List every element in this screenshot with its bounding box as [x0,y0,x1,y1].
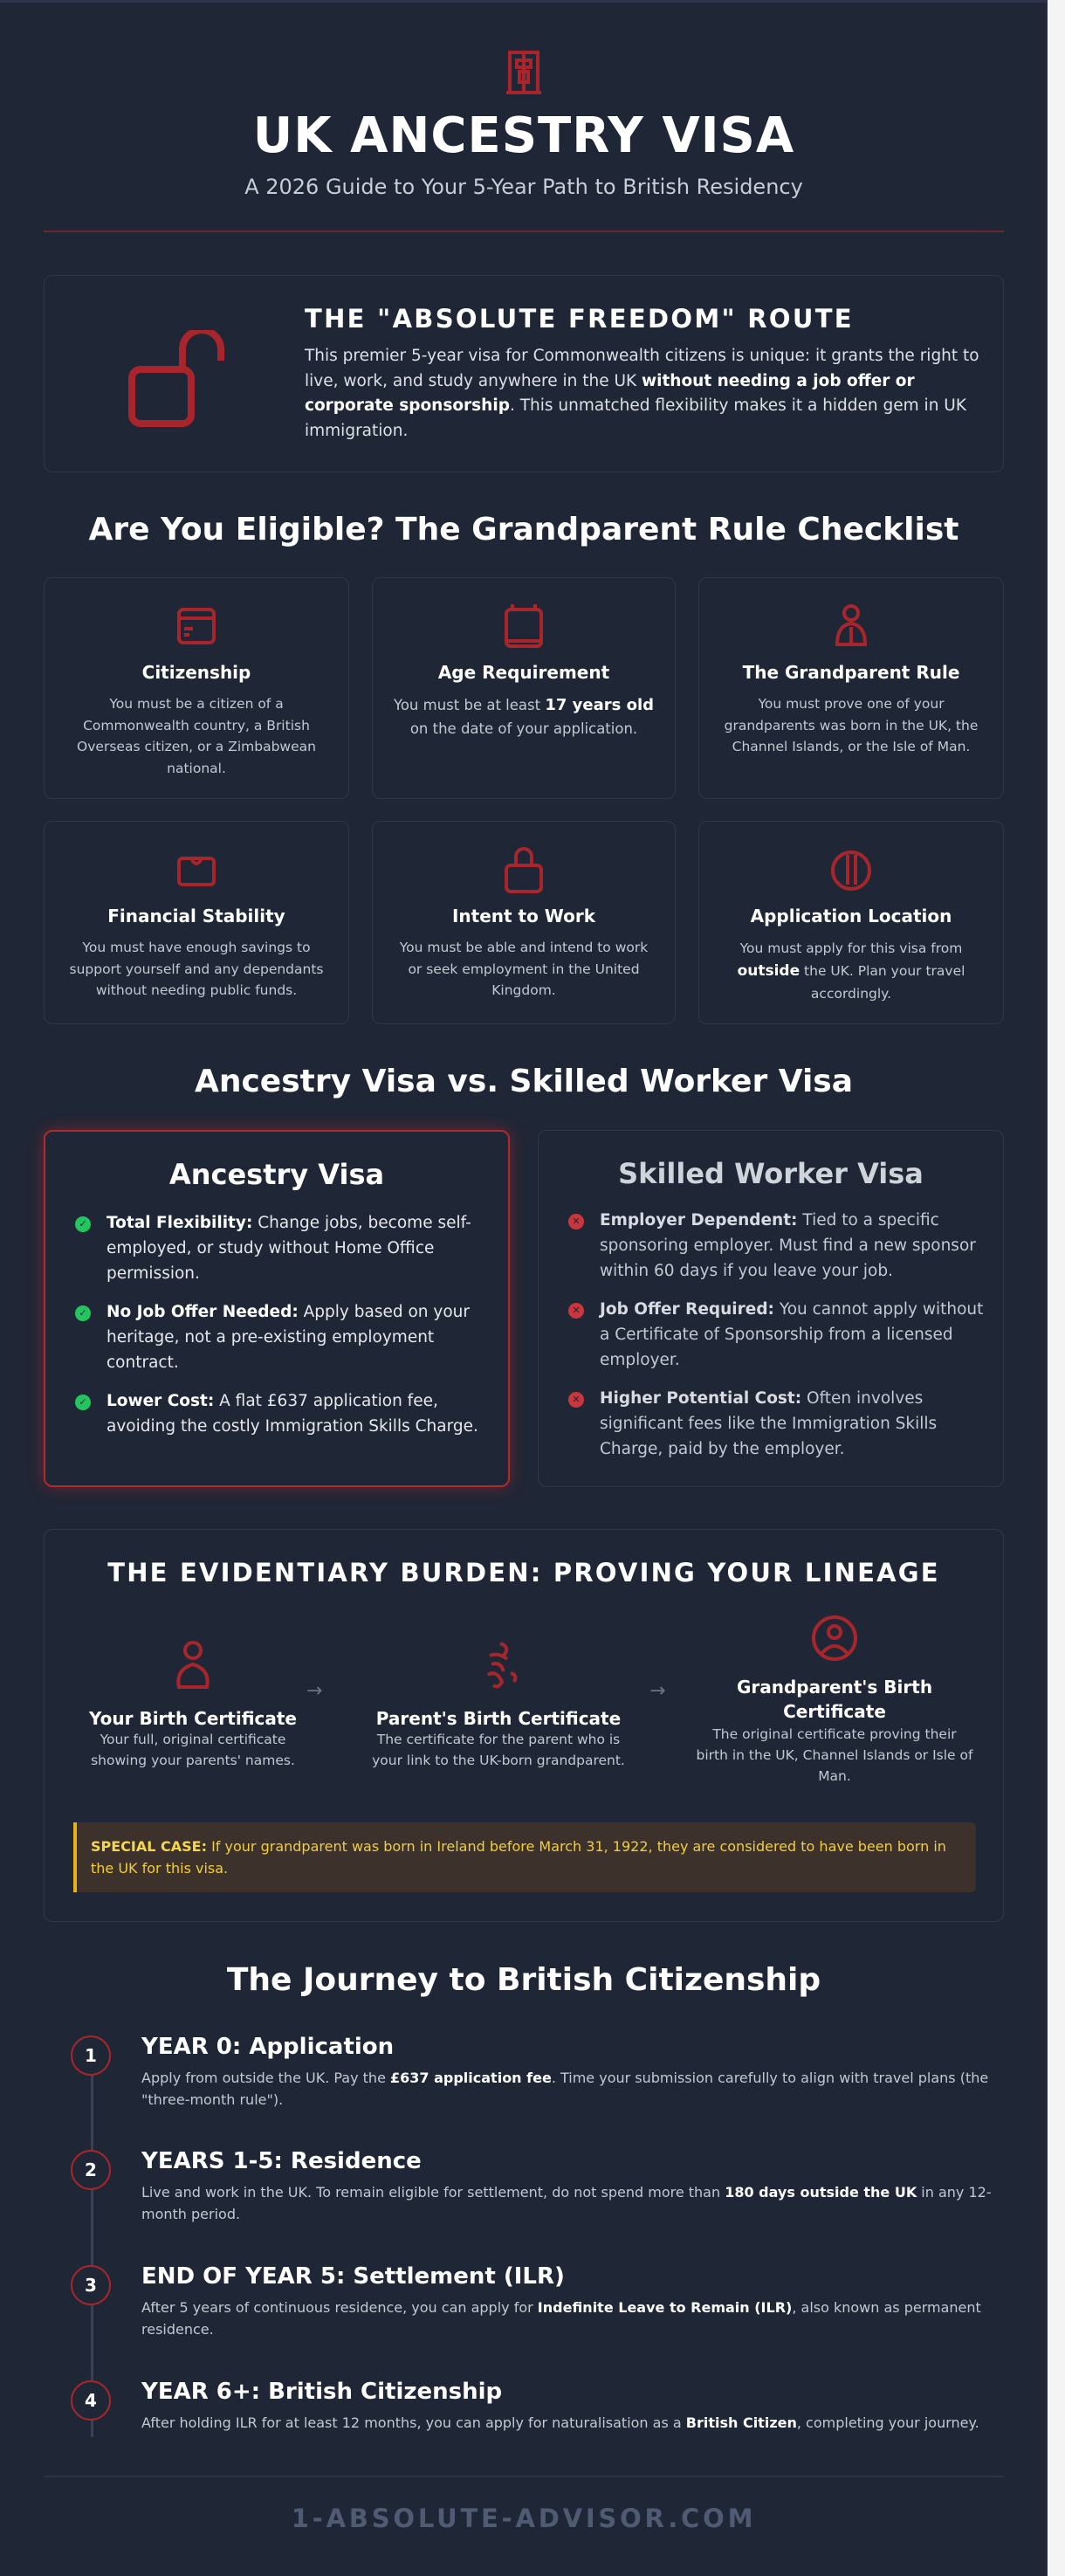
card: intent to work: You must be able and intend to work or seek employment in the United Kingdom. [400,940,648,998]
step 1 [71,2034,988,2108]
panel: absolute freedom route [44,275,1004,472]
step 3 [71,2263,981,2338]
step: grandparent's birth certificate: The original certificate proving their birth in the UK, Channel Islands or Isle of Man. [697,1726,972,1784]
card: grandparent rule: You must prove one of your grandparents was born in the UK, the Channel Islands, or the Isle of Man. [725,696,978,754]
heading: skilled worker visa: Skilled Worker Visa [618,1157,924,1190]
card: financial stability: Financial Stability [107,906,285,926]
icon: id card [177,608,216,644]
card: citizenship: You must be a citizen of a Commonwealth country, a British Overseas citizen, or a Zimbabwean national. [77,696,316,775]
panel: evidentiary burden [44,1529,1004,1922]
card: grandparent rule: The Grandparent Rule [743,662,959,683]
panel: skilled worker visa [538,1130,1004,1487]
step: parent's birth certificate: Parent's Birth Certificate [376,1708,621,1729]
card: financial stability [44,821,349,1024]
icon: family [487,1642,517,1689]
step 4: 4 [85,2390,97,2411]
card: financial stability: You must have enough savings to support yourself and any dependants without needing public funds. [70,940,323,998]
heading: comparison: Ancestry Visa vs. Skilled Worker Visa [195,1064,853,1099]
step: grandparent's birth certificate: Grandparent's Birth Certificate [737,1677,932,1722]
icon: person circle [812,1615,857,1661]
step 2 [71,2148,992,2222]
list: skilled worker drawbacks: ✕ [572,1394,581,1405]
list: ancestry benefits [75,1214,478,1436]
icon: globe [831,851,871,891]
step: your birth certificate: Your full, original certificate showing your parents' names. [91,1732,295,1768]
heading: eligibility: Are You Eligible? The Grandparent Rule Checklist [89,512,958,548]
list: skilled worker drawbacks [568,1211,983,1458]
list: skilled worker drawbacks: Employer Dependent: Tied to a specific sponsoring employer. Must find a new sponsor within 60 days if you leave your job. [600,1211,976,1280]
arrow: → [306,1680,322,1702]
arrow: → [649,1680,665,1702]
step: parent's birth certificate: The certificate for the parent who is your link to the UK-born grandparent. [372,1732,625,1768]
heading: ancestry visa: Ancestry Visa [169,1158,384,1191]
step 2: YEARS 1-5: Residence [141,2148,422,2174]
step 1: YEAR 0: Application [141,2034,394,2060]
step: grandparent's birth certificate [697,1615,973,1784]
list: ancestry benefits: Lower Cost: A flat £637 application fee, avoiding the costly Immigration Skills Charge. [106,1392,478,1436]
card: intent to work [372,821,676,1024]
text: freedom description: This premier 5-year visa for Commonwealth citizens is unique: it grants the right to live, work, and study anywhere in the UK without needing a job offer or corporate sponsorship. This unmatched flexibility makes it a hidden gem in UK immigration. [305,347,979,440]
card: application location [698,821,1004,1024]
icon: person [835,604,867,646]
list: skilled worker drawbacks: ✕ [572,1305,581,1316]
card: grandparent rule [698,577,1004,799]
list: ancestry benefits: ✓ [79,1218,87,1229]
timeline [71,2034,992,2437]
icon: wallet [177,857,216,886]
callout: special case: SPECIAL CASE: If your grandparent was born in Ireland before March 31, 1922, they are considered to have been born in the UK for this visa. [91,1838,946,1877]
list: skilled worker drawbacks: ✕ [572,1216,581,1227]
list: ancestry benefits: No Job Offer Needed: Apply based on your heritage, not a pre-existing employment contract. [106,1303,470,1372]
step 3: END OF YEAR 5: Settlement (ILR) [141,2263,565,2290]
card: age requirement: Age Requirement [438,662,609,683]
step 3: After 5 years of continuous residence, you can apply for Indefinite Leave to Remain (ILR), also known as permanent residence. [141,2299,981,2338]
heading: journey: The Journey to British Citizenship [227,1962,821,1998]
heading: freedom route: THE "ABSOLUTE FREEDOM" ROUTE [305,304,854,334]
callout: special case [73,1822,976,1892]
step: parent's birth certificate [372,1642,625,1768]
subtitle: A 2026 Guide to Your 5-Year Path to British Residency [244,175,803,199]
list: ancestry benefits: Total Flexibility: Change jobs, become self-employed, or study without Home Office permission. [106,1214,471,1283]
card: age requirement: You must be at least 17 years old on the date of your application. [394,696,654,737]
step 4: After holding ILR for at least 12 months, you can apply for naturalisation as a British Citizen, completing your journey. [141,2414,979,2431]
icon: phone box [506,51,541,94]
icon: calendar [505,604,543,648]
icon: unlocked padlock [128,330,224,427]
heading: evidentiary burden: THE EVIDENTIARY BURDEN: PROVING YOUR LINEAGE [107,1558,940,1588]
card: age requirement [372,577,676,799]
icon: person [176,1641,210,1689]
step: your birth certificate: Your Birth Certificate [89,1708,297,1729]
footer: 1-ABSOLUTE-ADVISOR.COM [292,2504,756,2533]
card: citizenship [44,577,349,799]
step 1: 1 [85,2045,97,2066]
step 2: 2 [85,2159,97,2180]
list: skilled worker drawbacks: Job Offer Required: You cannot apply without a Certificate of Sponsorship from a licensed employer. [600,1300,983,1369]
card: application location: Application Location [751,906,952,926]
title: UK ANCESTRY VISA [253,107,794,164]
panel: ancestry visa [44,1130,510,1487]
step 2: Live and work in the UK. To remain eligible for settlement, do not spend more than 180 days outside the UK in any 12-month period. [141,2184,992,2222]
step 4 [71,2379,979,2431]
step 3: 3 [85,2275,97,2296]
step 4: YEAR 6+: British Citizenship [141,2379,502,2405]
list: ancestry benefits: ✓ [79,1307,87,1319]
card: intent to work: Intent to Work [452,906,595,926]
list: skilled worker drawbacks: Higher Potential Cost: Often involves significant fees like the Immigration Skills Charge, paid by the employer. [600,1389,937,1458]
step 1: Apply from outside the UK. Pay the £637 application fee. Time your submission carefully to align with travel plans (the "three-month rule"). [141,2070,988,2108]
card: application location: You must apply for this visa from outside the UK. Plan your travel accordingly. [738,940,965,1002]
icon: briefcase [505,847,543,893]
card: citizenship: Citizenship [142,662,251,683]
list: ancestry benefits: ✓ [79,1396,87,1408]
step: your birth certificate [89,1641,297,1768]
